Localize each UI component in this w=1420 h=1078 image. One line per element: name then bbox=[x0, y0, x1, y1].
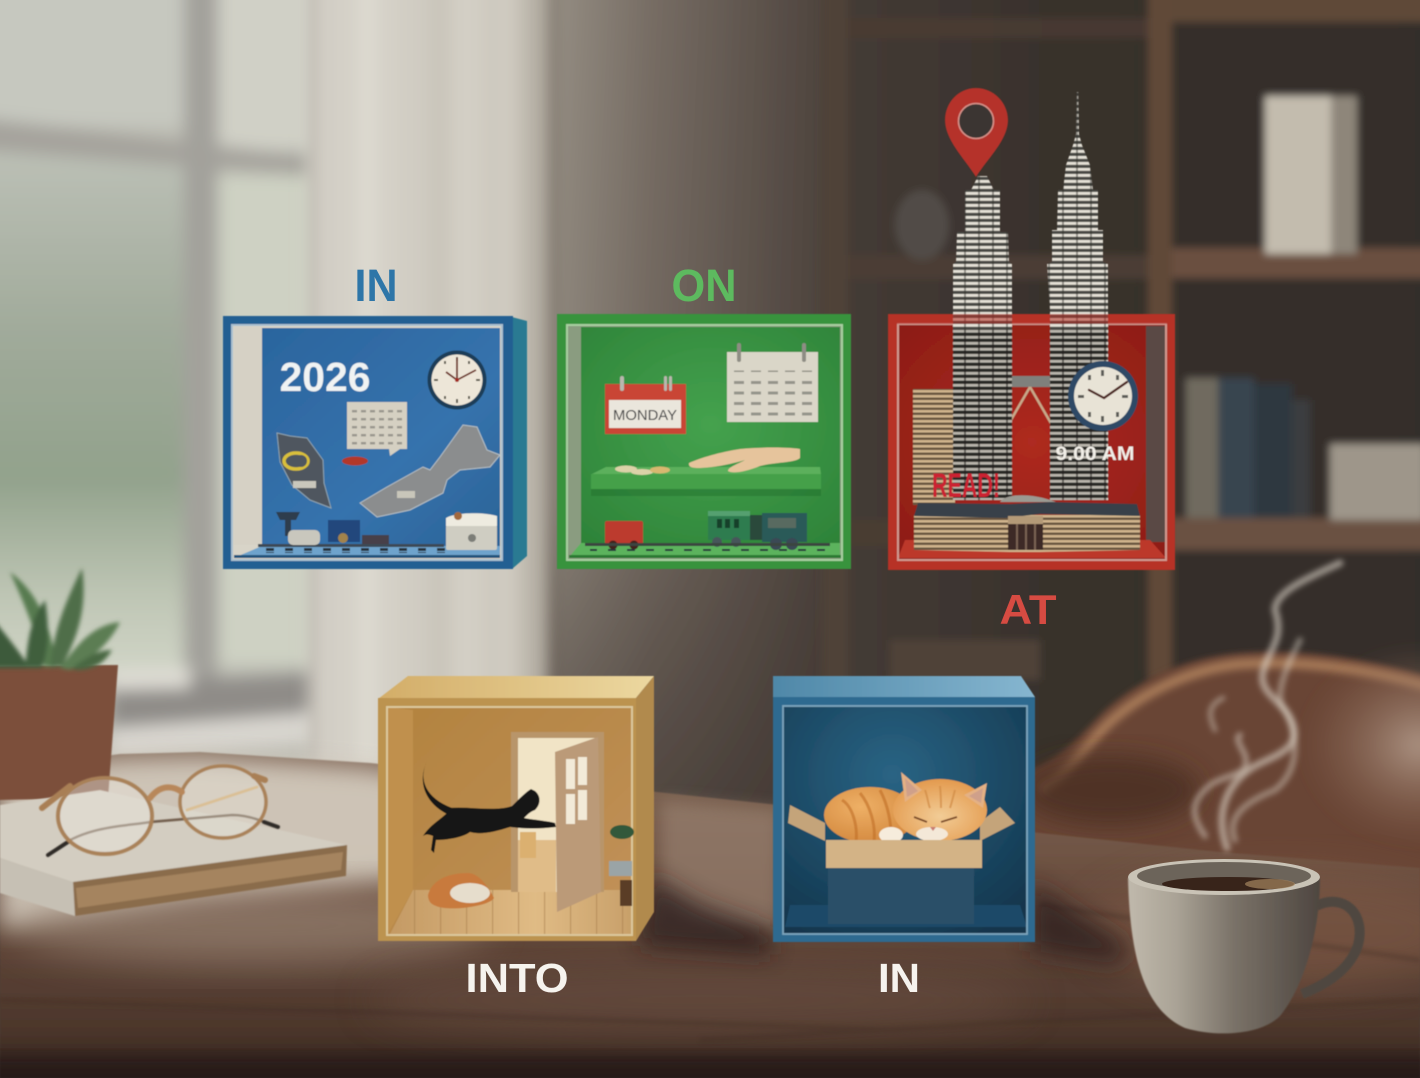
tan tower bbox=[913, 389, 955, 505]
icon: hand on shelf bbox=[689, 448, 800, 472]
floor bbox=[898, 540, 1166, 558]
background: window bbox=[0, 0, 320, 780]
track bbox=[585, 543, 830, 552]
model train on track bbox=[258, 512, 449, 553]
model green train bbox=[708, 511, 807, 550]
calendar: month sheet bbox=[727, 343, 818, 422]
pot bbox=[0, 665, 118, 800]
panel: AT box (towers, clock, READ!) bbox=[888, 88, 1175, 570]
background: wall bbox=[550, 0, 840, 840]
heading: IN: IN bbox=[878, 955, 920, 1001]
glasses bbox=[42, 766, 278, 855]
icon: wall clock bbox=[428, 350, 486, 410]
heading: AT: AT bbox=[1000, 586, 1057, 633]
back wall bbox=[387, 707, 632, 935]
icon: red capsule bbox=[342, 456, 368, 466]
icon: sleeping ginger cat bbox=[824, 772, 987, 843]
panel: IN box (cat in cardboard box) bbox=[773, 676, 1035, 942]
small plant and side table bbox=[609, 825, 634, 906]
handle bbox=[1302, 902, 1360, 994]
background: table bbox=[0, 752, 1420, 1078]
box shadows on table bbox=[640, 875, 770, 955]
coffee cup with steam bbox=[1128, 563, 1360, 1033]
back wall bbox=[898, 324, 1166, 560]
cardboard box front bbox=[826, 840, 982, 868]
icon: calendar note bbox=[347, 402, 407, 456]
sky bridge bbox=[1007, 376, 1053, 425]
nuggets on shelf bbox=[615, 466, 670, 475]
heading: IN: IN bbox=[354, 260, 398, 311]
top frame overlapping towers bbox=[888, 314, 1175, 324]
year text: 2026 bbox=[280, 354, 370, 400]
floor bbox=[570, 543, 840, 556]
red location pin bbox=[945, 88, 1008, 177]
cup body bbox=[1128, 878, 1320, 1033]
heading: ON: ON bbox=[672, 260, 736, 311]
cardboard box back flaps bbox=[788, 805, 825, 841]
steam bbox=[1195, 563, 1340, 848]
book bbox=[0, 790, 347, 916]
calendar: MONDAY bbox=[605, 376, 686, 434]
plant in pot bbox=[0, 568, 120, 800]
calendar: MONDAY: MONDAY bbox=[613, 407, 677, 424]
panel: INTO box (cat jumping through door) bbox=[378, 676, 654, 941]
READ! sign: READ! bbox=[932, 467, 1000, 505]
background: curtain bbox=[308, 0, 558, 780]
shelf bbox=[591, 467, 821, 496]
background: chair bbox=[1020, 645, 1420, 900]
panel: IN box (2026, Malaysia) bbox=[223, 316, 527, 569]
map: East Malaysia bbox=[360, 425, 500, 517]
blue stand bbox=[828, 868, 974, 924]
back wall bbox=[262, 328, 500, 546]
time label: 9.00 AM bbox=[1056, 444, 1134, 465]
panel: ON box (Monday, table, train) bbox=[557, 314, 851, 569]
back wall bbox=[782, 706, 1027, 934]
mall podium bbox=[914, 495, 1140, 552]
icon: clock bbox=[1068, 361, 1138, 431]
doorway bbox=[511, 732, 604, 892]
twin tower: left bbox=[953, 176, 1012, 500]
map: peninsular Malaysia bbox=[277, 433, 331, 508]
leaves bbox=[0, 568, 120, 670]
floor bbox=[390, 890, 632, 934]
back wall bbox=[581, 327, 840, 543]
heading: INTO: INTO bbox=[466, 955, 568, 1001]
door leaf bbox=[555, 737, 601, 912]
icon: black cat leaping bbox=[423, 761, 556, 853]
twin tower: right bbox=[1047, 92, 1108, 500]
icon: storage box bbox=[446, 512, 497, 550]
icon: orange slipper bbox=[428, 873, 494, 908]
background: bookshelf bbox=[822, 0, 1420, 840]
floor bbox=[236, 546, 500, 557]
model red wagon bbox=[605, 521, 643, 550]
